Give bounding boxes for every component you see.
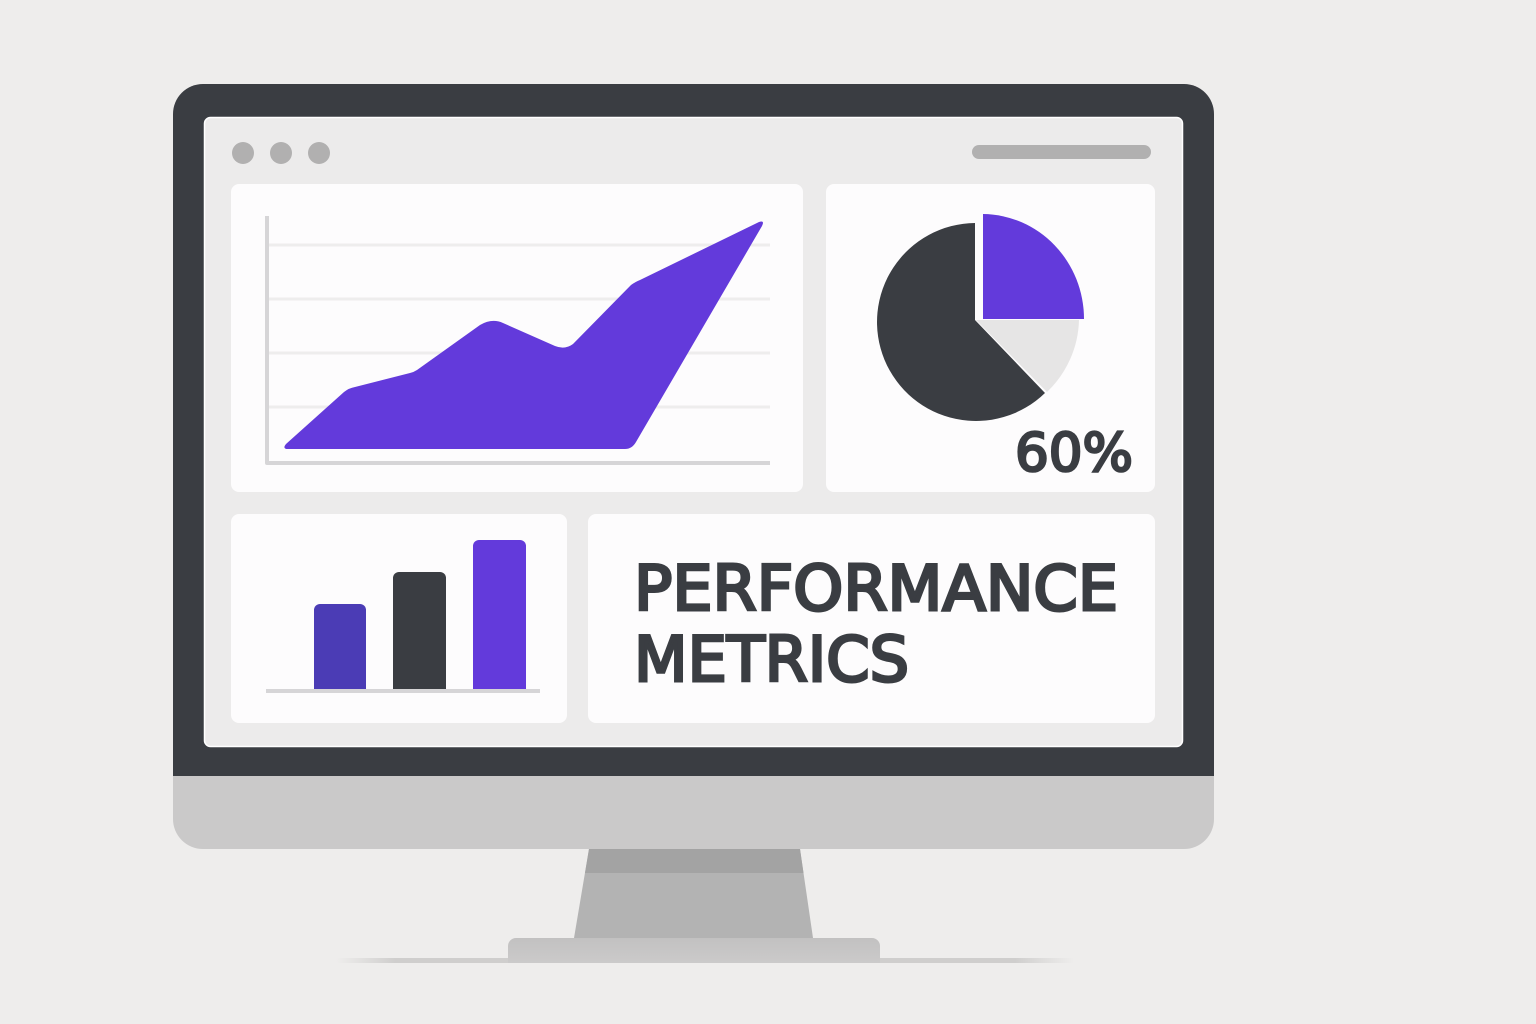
stand base [508, 938, 880, 963]
monitor bezel [173, 84, 1214, 776]
grid lines [269, 245, 770, 407]
window dots [232, 142, 330, 164]
panel: area chart [231, 184, 803, 492]
title text: PERFORMANCE [634, 552, 1118, 625]
monitor chin [173, 776, 1214, 849]
panel: pie chart [826, 184, 1155, 492]
purple area [284, 222, 763, 449]
stand neck shadow [585, 849, 804, 873]
monitor stand [336, 849, 1074, 963]
light slice [976, 320, 1079, 392]
floor shadow [336, 958, 1074, 963]
percentage label: 60% [1015, 423, 1133, 484]
title text line 2: METRICS [634, 623, 909, 696]
screen [204, 118, 1182, 746]
bar 3 [473, 540, 526, 689]
search bar [972, 145, 1151, 159]
panel: bar chart [231, 514, 567, 723]
bar 1 [314, 604, 366, 689]
dark slice [877, 223, 1045, 421]
stand neck [574, 849, 813, 938]
baseline [266, 689, 540, 693]
panel: title [588, 514, 1155, 723]
bar 2 [393, 572, 446, 689]
axes [267, 216, 770, 463]
purple slice [983, 214, 1084, 319]
